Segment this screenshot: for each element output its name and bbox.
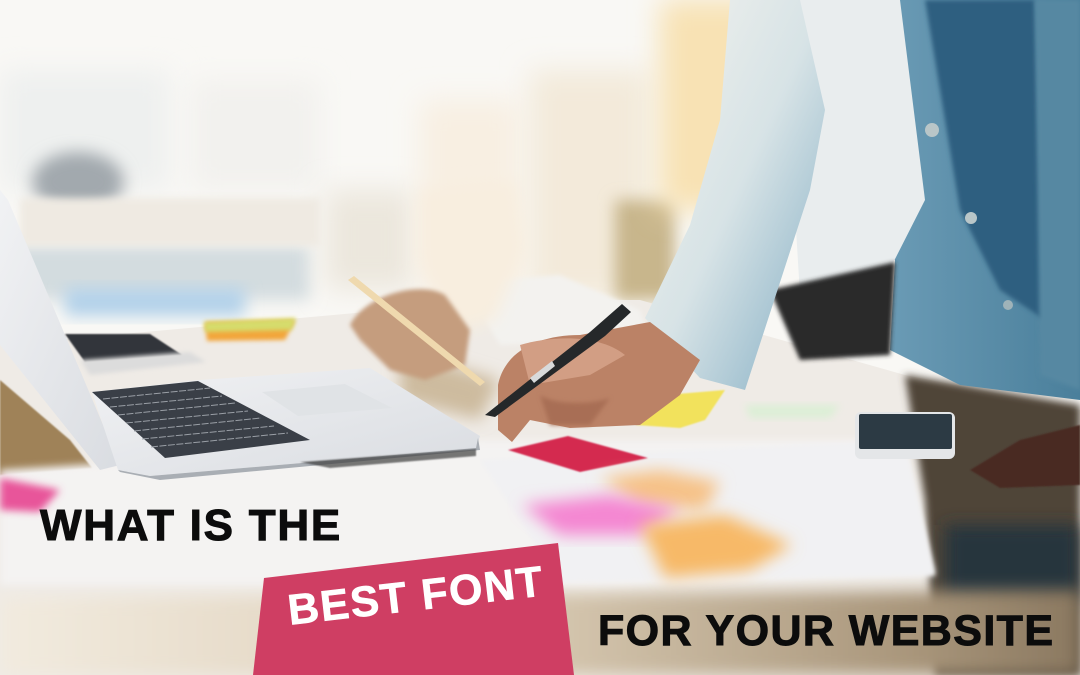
- heading: for your website: FOR YOUR WEBSITE: [598, 607, 1054, 655]
- sticky notes: [0, 318, 840, 578]
- front person shirt: [645, 0, 1080, 400]
- table surface: [0, 300, 1080, 675]
- hand at right edge: [970, 425, 1080, 488]
- laptop: [0, 190, 480, 480]
- phone and dark book: [65, 334, 955, 459]
- back person arm and pencil: [348, 180, 525, 386]
- front hand with marker pen: [485, 304, 700, 442]
- heading: what is the: WHAT IS THE: [40, 501, 342, 550]
- paper on desk: [485, 275, 650, 345]
- banner: best font: [253, 543, 574, 675]
- banner text: BEST FONT: [285, 558, 547, 635]
